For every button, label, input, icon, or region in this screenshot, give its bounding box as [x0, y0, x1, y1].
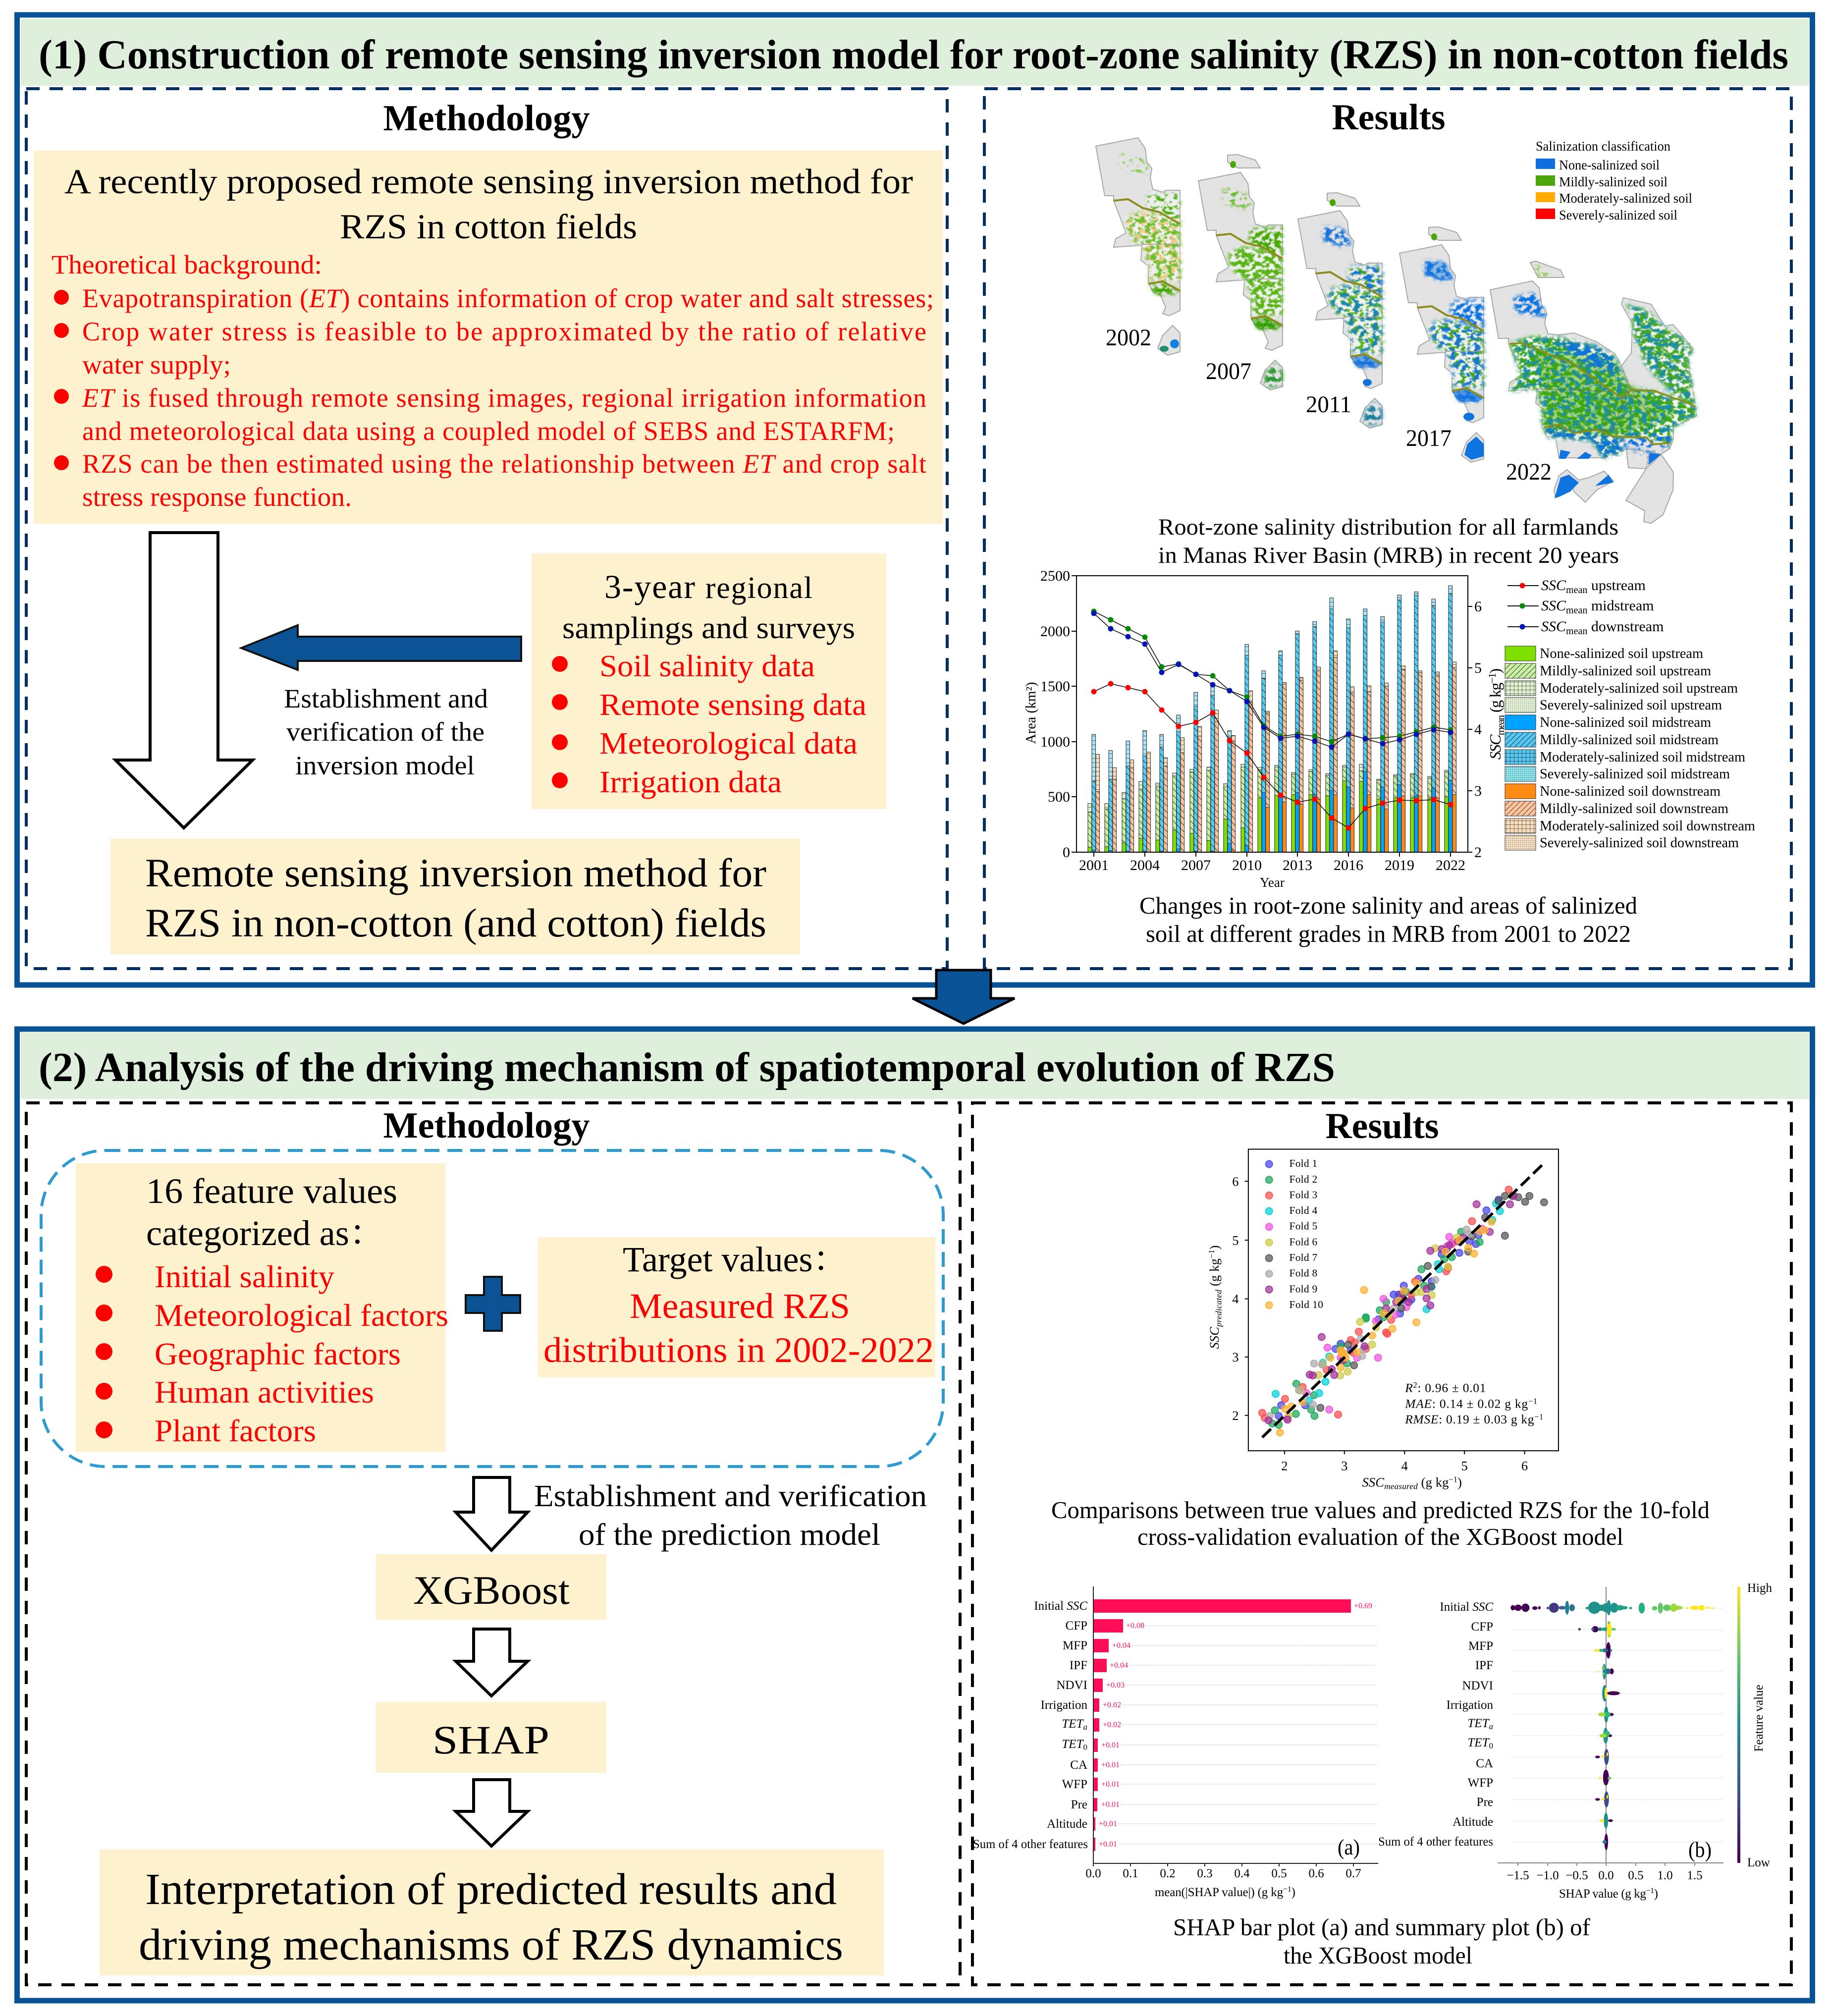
row labels: CA	[1070, 1758, 1087, 1772]
text block: feature values: categorized as：	[146, 1213, 385, 1253]
text block: theoretical background box	[34, 151, 943, 524]
fold 3 points	[1259, 1186, 1512, 1421]
legend: SSC lines: upstream	[1587, 577, 1646, 594]
text block: theoretical background box: and meteorological data using a coupled model of SEBS and ESTARFM;	[82, 416, 895, 446]
legend: salinized area patches: Moderately-salinized soil midstream	[1540, 750, 1745, 765]
value labels: +0.03	[1106, 1681, 1125, 1689]
text block: interpretation box: Interpretation of predicted results and	[145, 1865, 837, 1914]
axis tick labels: 2	[1474, 844, 1482, 861]
axis tick labels: 2010	[1232, 857, 1262, 873]
legend: folds: Fold 2	[1290, 1173, 1317, 1185]
axis tick labels: 2007	[1181, 857, 1211, 873]
value labels: +0.01	[1099, 1820, 1117, 1828]
axes labels: predicated	[1214, 1290, 1223, 1328]
row labels: Sum of 4 other features	[973, 1838, 1088, 1851]
statistics text	[1404, 1380, 1543, 1426]
fold 4 points	[1272, 1200, 1504, 1404]
row labels: Initial SSC	[1440, 1600, 1493, 1614]
axis tick labels: 6	[1474, 599, 1482, 615]
map 2002	[1096, 138, 1180, 355]
panel: methodology 2	[26, 1103, 960, 1985]
value labels: +0.04	[1112, 1641, 1130, 1650]
panel: results 1	[984, 89, 1791, 969]
text block: target values: Target values：	[623, 1240, 848, 1279]
legend: folds: Fold 3	[1290, 1189, 1317, 1200]
legend: SSC lines: mean	[1566, 585, 1587, 596]
caption: salinity distribution: Root-zone salinity distribution for all farmlands	[1158, 514, 1618, 540]
fold 7 points	[1317, 1193, 1548, 1412]
text block: theoretical background box: Theoretical background:	[52, 250, 322, 279]
text block: resulting method box: RZS in non-cotton (and cotton) fields	[145, 900, 766, 945]
text block: feature values: Initial salinity	[155, 1259, 334, 1294]
text block: establishment and verification	[534, 1479, 927, 1552]
colorbar: Feature value	[1752, 1685, 1766, 1752]
legend: folds: Fold 10	[1290, 1299, 1323, 1310]
chart: SHAP summary plot	[1378, 1581, 1773, 1901]
axis tick labels: 2016	[1334, 857, 1363, 873]
axis tick labels: (g kg	[1486, 683, 1504, 716]
axes labels: 5	[1232, 1233, 1239, 1248]
caption: salinity changes	[1139, 892, 1637, 947]
text block: theoretical background box: ET is fused through remote sensing images, regional irrigation information	[82, 383, 926, 413]
legend: SSC lines: SSC	[1541, 618, 1566, 635]
value labels: +0.04	[1110, 1661, 1128, 1670]
row labels	[1378, 1600, 1493, 1849]
statistics text: MAE: 0.14 ± 0.02 g kg	[1405, 1396, 1528, 1411]
axes	[1072, 576, 1472, 857]
row labels: CA	[1476, 1757, 1493, 1770]
panel: results 2	[972, 1103, 1791, 1985]
legend: salinized area patches: Mildly-salinized soil downstream	[1540, 801, 1728, 817]
legend: folds: Fold 9	[1290, 1283, 1317, 1295]
legend: SSC lines: SSC	[1541, 577, 1566, 594]
row labels: NDVI	[1056, 1679, 1087, 1692]
legend: folds: Fold 6	[1290, 1236, 1317, 1248]
legend: folds: Fold 8	[1290, 1267, 1317, 1279]
chart: scatter of measured vs predicted	[1207, 1149, 1559, 1491]
text block: establishment and verification: Establishment and verification	[534, 1479, 927, 1513]
chart: area bars and SSC lines	[1023, 568, 1755, 890]
value labels: +0.01	[1101, 1761, 1120, 1769]
x ticks: 0.5	[1628, 1869, 1644, 1882]
legend: salinization classification: None-salinized soil	[1559, 158, 1660, 172]
text block: regional samplings box: 3-year regional	[604, 568, 812, 605]
text block: theoretical background box: RZS in cotton fields	[340, 208, 637, 246]
dashed grouping outline	[41, 1150, 943, 1467]
axes labels	[1207, 1174, 1528, 1491]
value labels: +0.01	[1101, 1780, 1120, 1789]
fit line	[1262, 1163, 1544, 1437]
line: SSC midstream	[1091, 608, 1453, 744]
row labels: TET	[1467, 1717, 1490, 1730]
value labels: +0.02	[1103, 1721, 1121, 1729]
x ticks: −1.0	[1536, 1869, 1559, 1882]
line: SSC downstream	[1091, 610, 1453, 750]
x ticks	[1085, 1867, 1361, 1899]
value labels: +0.01	[1099, 1840, 1117, 1849]
axes labels: −1	[1207, 1250, 1216, 1258]
panel: section 2 frame	[17, 1029, 1812, 2001]
axes labels: measured	[1384, 1482, 1418, 1491]
zero line and axis	[1498, 1587, 1723, 1866]
statistics text: : 0.96 ± 0.01	[1417, 1380, 1486, 1395]
axes	[1093, 1586, 1378, 1866]
value labels	[1099, 1602, 1372, 1849]
section 2 header	[21, 1033, 1809, 1099]
row labels: CFP	[1066, 1619, 1087, 1633]
x ticks: −1	[1646, 1887, 1654, 1895]
panel label (a): (a)	[1338, 1835, 1360, 1859]
axis tick labels	[1023, 568, 1506, 890]
label: 2002: 2002	[1106, 325, 1151, 351]
row labels: TET	[1062, 1717, 1084, 1731]
beeswarm: rows 5 to 12	[1595, 1685, 1620, 1850]
row labels: Sum of 4 other features	[1378, 1835, 1493, 1849]
legend: salinization classification: Mildly-salinized soil	[1559, 174, 1668, 189]
row labels: TET	[1062, 1738, 1084, 1751]
value labels: +0.69	[1354, 1602, 1372, 1610]
row labels: WFP	[1468, 1776, 1493, 1790]
text block: feature values: Human activities	[155, 1374, 374, 1410]
axes labels: −1	[1449, 1474, 1457, 1484]
text block: target values: distributions in 2002-2022	[543, 1330, 934, 1370]
caption: salinity distribution: in Manas River Basin (MRB) in recent 20 years	[1158, 543, 1619, 568]
x ticks: 0.1	[1123, 1867, 1138, 1880]
text block: resulting method box	[110, 839, 800, 954]
row labels: Initial SSC	[1034, 1599, 1087, 1613]
axis tick labels: 2004	[1130, 857, 1160, 873]
legend: salinized area patches: Mildly-salinized soil midstream	[1540, 732, 1719, 748]
axis tick labels: 4	[1474, 721, 1482, 738]
legend: salinization classification: Salinization classification	[1536, 139, 1670, 154]
arrow: blue left arrow	[241, 625, 521, 670]
text block: establishment and verification: verification of the	[286, 717, 484, 747]
legend: salinized area patches: None-salinized soil midstream	[1540, 715, 1711, 730]
text block: regional samplings box	[532, 553, 886, 809]
legend: salinized area patches: Mildly-salinized soil upstream	[1540, 663, 1711, 679]
heading: results: Results	[1326, 1106, 1439, 1146]
section 1 header: (1) Construction of remote sensing inversion model for root-zone salinity (RZS) in non-cotton fields	[39, 32, 1788, 78]
axes labels: )	[1207, 1245, 1222, 1250]
text block: regional samplings box: Remote sensing data	[599, 688, 866, 722]
axis tick labels: 500	[1048, 789, 1070, 805]
colorbar: Low	[1747, 1856, 1770, 1869]
legend: folds: Fold 7	[1290, 1252, 1317, 1263]
fold 10 points	[1277, 1218, 1495, 1436]
legend: SSC lines: downstream	[1587, 618, 1664, 635]
chart: SHAP bar plot	[973, 1586, 1378, 1899]
label: 2017: 2017	[1406, 425, 1452, 451]
heading: results: Results	[1332, 97, 1446, 138]
legend: SSC lines: mean	[1566, 605, 1587, 616]
text block: interpretation box	[100, 1850, 884, 1975]
section 1 header	[21, 19, 1809, 86]
text block: establishment and verification	[284, 684, 488, 780]
axes labels: 3	[1232, 1350, 1239, 1364]
panel: section 1 frame	[17, 15, 1812, 985]
heading: methodology: Methodology	[383, 1105, 590, 1146]
x ticks: 0.3	[1197, 1867, 1213, 1880]
value labels: +0.08	[1126, 1622, 1144, 1630]
x ticks: −0.5	[1565, 1869, 1588, 1882]
text block: interpretation box: driving mechanisms of RZS dynamics	[139, 1920, 843, 1969]
x ticks: mean(|SHAP value|) (g kg	[1155, 1886, 1283, 1899]
row labels	[973, 1599, 1088, 1851]
box: SHAP: SHAP	[432, 1717, 549, 1762]
caption: salinity changes: soil at different grades in MRB from 2001 to 2022	[1146, 920, 1631, 947]
axis tick labels: −1	[1486, 673, 1498, 683]
heading: methodology: Methodology	[383, 98, 590, 139]
label: 2007: 2007	[1206, 358, 1251, 384]
x ticks: 0.0	[1085, 1867, 1101, 1880]
text block: resulting method box: Remote sensing inversion method for	[145, 850, 766, 895]
legend: SSC lines	[1507, 577, 1664, 637]
x ticks: 0.4	[1234, 1867, 1250, 1880]
text block: establishment and verification: inversion model	[295, 751, 475, 780]
statistics text: RMSE: 0.19 ± 0.03 g kg	[1405, 1412, 1534, 1426]
row labels: CFP	[1471, 1620, 1493, 1634]
axis tick labels: 2013	[1283, 857, 1312, 873]
text block: target values	[538, 1237, 935, 1377]
x ticks: 0.6	[1308, 1867, 1324, 1880]
text block: theoretical background box: water supply;	[82, 350, 231, 380]
fold 9 points	[1265, 1193, 1517, 1424]
row labels: MFP	[1063, 1639, 1087, 1652]
text block: establishment and verification: Establishment and	[284, 684, 488, 713]
label: 2022: 2022	[1506, 459, 1552, 485]
axis tick labels: 2500	[1040, 568, 1070, 584]
x ticks: 0.0	[1598, 1869, 1614, 1882]
legend: SSC lines: midstream	[1587, 598, 1654, 614]
text block: feature values: Plant factors	[155, 1413, 316, 1448]
legend: SSC lines: mean	[1566, 626, 1587, 637]
row labels: IPF	[1070, 1659, 1087, 1672]
caption: scatter: cross-validation evaluation of the XGBoost model	[1137, 1523, 1623, 1550]
colorbar	[1737, 1581, 1773, 1869]
section 2 header: (2) Analysis of the driving mechanism of spatiotemporal evolution of RZS	[39, 1044, 1335, 1090]
statistics text: −1	[1528, 1396, 1537, 1406]
axis tick labels: 2000	[1040, 623, 1070, 640]
text block: theoretical background box: Evapotranspiration (ET) contains information of crop water and salt stresses;	[82, 283, 934, 313]
row labels: Pre	[1071, 1798, 1087, 1811]
row labels: TET	[1467, 1736, 1490, 1749]
x ticks: 1.0	[1657, 1869, 1673, 1882]
axes labels: 6	[1232, 1174, 1239, 1189]
legend: salinized area patches: Severely-salinized soil midstream	[1540, 766, 1730, 782]
text block: theoretical background box: A recently proposed remote sensing inversion method for	[64, 163, 913, 201]
x ticks: 0.5	[1271, 1867, 1287, 1880]
map 2017	[1399, 227, 1484, 462]
text block: regional samplings box: samplings and surveys	[562, 611, 855, 645]
text block: target values: Measured RZS	[630, 1286, 850, 1326]
row labels: WFP	[1062, 1778, 1087, 1791]
row labels: Altitude	[1047, 1817, 1087, 1831]
text block: establishment and verification: of the prediction model	[579, 1518, 880, 1552]
axes labels: SSC	[1207, 1327, 1222, 1349]
statistics text: 2	[1413, 1380, 1417, 1390]
legend: salinized area patches: Severely-salinized soil downstream	[1540, 835, 1739, 851]
axis tick labels: 5	[1474, 660, 1482, 676]
text block: theoretical background box: Crop water stress is feasible to be approximated by the ratio of relative	[82, 317, 926, 346]
legend: salinization classification: Moderately-salinized soil	[1559, 191, 1692, 206]
axes labels: 4	[1232, 1292, 1239, 1307]
legend: salinization classification	[1536, 139, 1692, 222]
text block: regional samplings box: Soil salinity data	[599, 650, 815, 683]
text block: feature values: Geographic factors	[155, 1336, 401, 1371]
row labels: Pre	[1477, 1796, 1493, 1809]
x ticks: )	[1654, 1887, 1658, 1901]
caption: SHAP: the XGBoost model	[1284, 1942, 1472, 1969]
axis tick labels: 1000	[1040, 734, 1070, 750]
arrow: down 1	[456, 1477, 528, 1550]
text block: theoretical background box: stress response function.	[82, 482, 352, 512]
axes labels: 3	[1341, 1458, 1347, 1473]
box: SHAP	[376, 1702, 606, 1773]
row labels: NDVI	[1462, 1679, 1493, 1692]
x ticks: )	[1291, 1886, 1295, 1899]
dotted rows	[1511, 1608, 1723, 1842]
axis tick labels: 1500	[1040, 678, 1070, 695]
fold 5 points	[1284, 1225, 1486, 1421]
x ticks: SHAP value (g kg	[1559, 1887, 1646, 1901]
map 2011	[1298, 193, 1382, 428]
axis tick labels: 2022	[1436, 857, 1465, 873]
panel: methodology 1	[26, 89, 947, 969]
text block: feature values: Meteorological factors	[155, 1298, 448, 1333]
legend: salinized area patches: None-salinized soil upstream	[1540, 646, 1703, 661]
line: SSC upstream	[1091, 681, 1453, 830]
legend: folds: Fold 1	[1290, 1157, 1317, 1169]
value labels: +0.01	[1101, 1800, 1120, 1809]
text block: feature values: 16 feature values	[146, 1171, 397, 1211]
arrow: down 2	[456, 1629, 528, 1696]
fold 8 points	[1266, 1226, 1473, 1419]
legend: folds: Fold 4	[1290, 1204, 1317, 1216]
caption: scatter	[1051, 1496, 1710, 1550]
axes labels: 5	[1461, 1458, 1468, 1473]
row labels: a	[1083, 1722, 1087, 1732]
axis tick labels: 3	[1474, 783, 1482, 799]
text block: regional samplings box: Meteorological data	[599, 727, 858, 761]
text block: theoretical background box: RZS can be then estimated using the relationship between ET and crop salt	[82, 449, 926, 479]
axis tick labels: mean	[1495, 715, 1506, 735]
beeswarm: rows 1 to 4	[1510, 1600, 1714, 1680]
colorbar: High	[1747, 1581, 1773, 1595]
box: XGBoost	[376, 1554, 606, 1620]
axis tick labels: Area (km²)	[1023, 682, 1039, 744]
x ticks: 0.7	[1345, 1867, 1361, 1880]
axes labels: (g kg	[1207, 1258, 1222, 1290]
bars	[1093, 1599, 1351, 1851]
arrow: connector between sections	[913, 970, 1015, 1024]
axes labels: (g kg	[1418, 1475, 1449, 1490]
legend: salinized area patches: Moderately-salinized soil upstream	[1540, 681, 1738, 696]
axis tick labels: SSC	[1486, 734, 1504, 760]
legend: salinization classification: Severely-salinized soil	[1559, 208, 1677, 222]
box: XGBoost: XGBoost	[413, 1568, 570, 1613]
x ticks	[1506, 1869, 1703, 1901]
row labels: 0	[1489, 1741, 1493, 1750]
caption: salinity distribution	[1158, 514, 1619, 568]
row labels: Altitude	[1452, 1815, 1493, 1829]
stacked bars	[1088, 586, 1456, 852]
dotted rows	[1119, 1606, 1377, 1844]
fold 2 points	[1269, 1228, 1483, 1428]
legend: salinized area patches	[1505, 646, 1755, 851]
row labels: MFP	[1468, 1639, 1493, 1653]
value labels: +0.01	[1101, 1741, 1120, 1749]
caption: scatter: Comparisons between true values and predicted RZS for the 10-fold	[1051, 1496, 1710, 1524]
axes labels: 2	[1281, 1458, 1288, 1473]
text block: regional samplings box: Irrigation data	[599, 765, 782, 799]
x ticks: 1.5	[1687, 1869, 1703, 1882]
statistics text: R	[1404, 1380, 1413, 1395]
axes labels: 6	[1521, 1458, 1528, 1473]
map 2007	[1198, 155, 1283, 390]
axes labels: )	[1457, 1475, 1462, 1490]
row labels: 0	[1083, 1743, 1087, 1752]
row labels: a	[1489, 1722, 1493, 1731]
arrow: large hollow down arrow	[115, 533, 253, 828]
value labels: +0.02	[1103, 1701, 1121, 1709]
row labels: IPF	[1475, 1659, 1493, 1672]
statistics text: −1	[1534, 1412, 1543, 1421]
legend: salinized area patches: None-salinized soil downstream	[1540, 784, 1721, 799]
fold 6 points	[1285, 1234, 1460, 1419]
legend: SSC lines: SSC	[1541, 598, 1566, 614]
axes labels: 4	[1401, 1458, 1408, 1473]
caption: SHAP	[1173, 1913, 1591, 1969]
legend: salinized area patches: Moderately-salinized soil downstream	[1540, 818, 1755, 834]
fold 1 points	[1275, 1196, 1502, 1419]
legend: folds	[1266, 1157, 1323, 1310]
map 2022	[1490, 261, 1697, 523]
axes labels: 2	[1232, 1408, 1239, 1423]
axis tick labels: Year	[1260, 875, 1285, 890]
axis tick labels: 0	[1063, 844, 1070, 861]
row labels: Irrigation	[1447, 1698, 1493, 1712]
label: 2011: 2011	[1306, 391, 1351, 418]
text block: feature values	[76, 1163, 448, 1452]
axis tick labels: 2001	[1079, 857, 1109, 873]
axis tick labels: 2019	[1385, 857, 1414, 873]
axes labels: SSC	[1362, 1475, 1384, 1490]
axis tick labels: )	[1486, 668, 1504, 674]
legend: salinized area patches: Severely-salinized soil upstream	[1540, 698, 1722, 713]
x ticks: −1	[1283, 1885, 1291, 1894]
legend: folds: Fold 5	[1290, 1220, 1317, 1232]
caption: SHAP: SHAP bar plot (a) and summary plot (b) of	[1173, 1913, 1591, 1941]
icon: plus	[466, 1277, 520, 1331]
x ticks: 0.2	[1160, 1867, 1176, 1880]
panel label (b): (b)	[1688, 1838, 1712, 1862]
x ticks: −1.5	[1506, 1869, 1529, 1882]
caption: salinity changes: Changes in root-zone salinity and areas of salinized	[1139, 892, 1637, 919]
row labels: Irrigation	[1041, 1698, 1087, 1712]
arrow: down 3	[456, 1780, 528, 1846]
